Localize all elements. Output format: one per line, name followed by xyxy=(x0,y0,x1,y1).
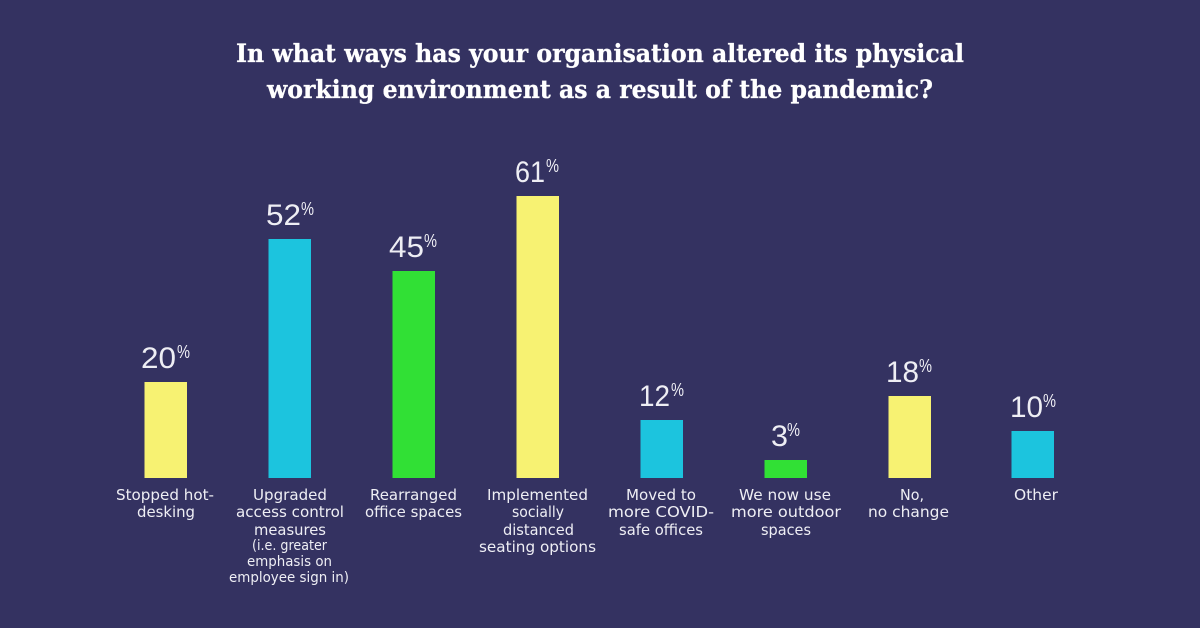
bar group: outdoor spaces 3%: % xyxy=(787,420,800,440)
bar group: upgraded access control 52%: measures xyxy=(254,521,326,539)
bar group: other 10%: % xyxy=(1043,391,1056,411)
title: In what ways has your organisation altered its physical xyxy=(236,39,964,68)
bar group: rearranged office spaces 45%: % xyxy=(424,231,437,251)
bar group: rearranged office spaces 45% xyxy=(365,231,462,521)
bar group: outdoor spaces 3%: 3 xyxy=(771,420,788,453)
bar group: stopped hot-desking 20%: % xyxy=(177,342,190,362)
bar group: upgraded access control 52%: employee sign in) xyxy=(229,570,349,586)
bar group: stopped hot-desking 20%: Stopped hot- xyxy=(116,486,214,504)
bar group: moved to COVID-safe offices 12%: 12 xyxy=(639,380,670,413)
bar chart xyxy=(116,156,1059,586)
bar group: no change 18%: no change xyxy=(868,503,949,521)
bar group: moved to COVID-safe offices 12%: Moved to xyxy=(626,486,696,504)
bar group: upgraded access control 52%: access control xyxy=(236,503,344,521)
title: working environment as a result of the pandemic? xyxy=(266,75,933,104)
bar group: socially distanced seating 61% xyxy=(479,156,596,556)
bar group: moved to COVID-safe offices 12%: more COVID- xyxy=(608,503,714,521)
bar group: no change 18%: % xyxy=(919,356,932,376)
bar group: other 10% xyxy=(1010,391,1059,504)
bar group: upgraded access control 52%: (i.e. greater xyxy=(252,538,327,554)
bar group: rearranged office spaces 45%: Rearranged xyxy=(370,486,457,504)
bar group: upgraded access control 52%: % xyxy=(301,199,314,219)
bar group: outdoor spaces 3%: We now use xyxy=(739,486,831,504)
bar group: no change 18%: 18 xyxy=(886,356,919,389)
bar group: upgraded access control 52%: Upgraded xyxy=(253,486,327,504)
bar group: socially distanced seating 61%: Implemented xyxy=(487,486,588,504)
bar group: outdoor spaces 3%: spaces xyxy=(761,521,811,539)
bar group: outdoor spaces 3% xyxy=(731,420,842,539)
bar group: socially distanced seating 61%: 61 xyxy=(515,156,545,189)
bar group: no change 18%: No, xyxy=(900,486,924,504)
bar group: no change 18% xyxy=(868,356,949,521)
bar group: rearranged office spaces 45%: office spaces xyxy=(365,503,462,521)
bar group: outdoor spaces 3%: more outdoor xyxy=(731,503,842,521)
title xyxy=(236,39,964,104)
bar group: moved to COVID-safe offices 12%: safe offices xyxy=(619,521,703,539)
bar group: upgraded access control 52% xyxy=(229,199,349,586)
bar group: moved to COVID-safe offices 12% xyxy=(608,380,714,539)
bar group: socially distanced seating 61%: seating options xyxy=(479,538,596,556)
bar group: other 10%: 10 xyxy=(1010,391,1043,424)
bar group: other 10%: Other xyxy=(1014,486,1059,504)
bar group: stopped hot-desking 20% xyxy=(116,342,214,521)
bar group: socially distanced seating 61%: socially xyxy=(512,503,564,521)
bar group: upgraded access control 52%: emphasis on xyxy=(247,554,332,570)
bar group: stopped hot-desking 20%: 20 xyxy=(141,342,176,375)
bar group: upgraded access control 52%: 52 xyxy=(266,199,301,232)
bar group: socially distanced seating 61%: % xyxy=(546,156,559,176)
bar group: stopped hot-desking 20%: desking xyxy=(137,503,195,521)
bar group: moved to COVID-safe offices 12%: % xyxy=(671,380,684,400)
bar group: rearranged office spaces 45%: 45 xyxy=(389,231,424,264)
bar group: socially distanced seating 61%: distanced xyxy=(503,521,574,539)
